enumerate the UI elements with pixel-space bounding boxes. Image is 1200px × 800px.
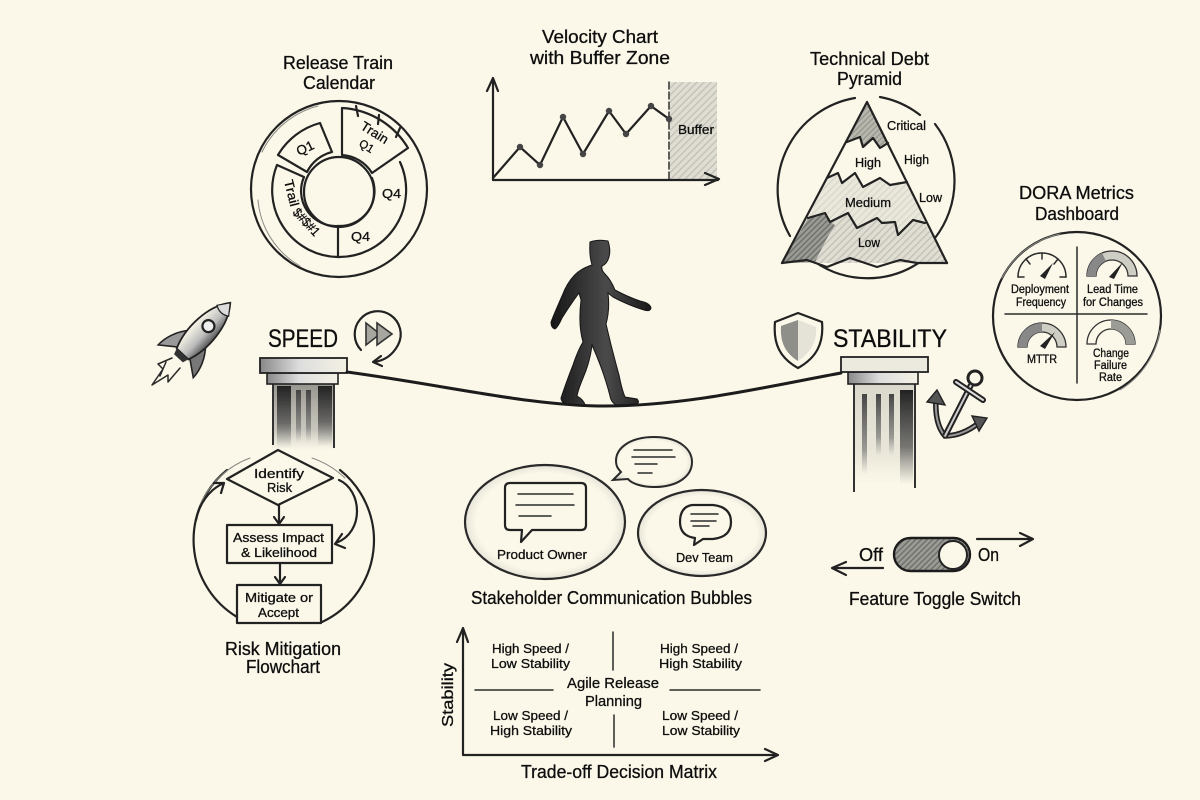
flow arrow: assess to mitigate	[275, 563, 285, 584]
column: right pillar	[841, 357, 928, 492]
pyramid labels: Medium	[845, 195, 891, 210]
heading: risk mitigation	[225, 639, 341, 677]
pyramid enclosing circle	[778, 97, 955, 278]
panel: stakeholder communication bubbles	[465, 437, 766, 608]
label: speed: SPEED	[268, 325, 338, 353]
segment: train Q1	[342, 106, 408, 173]
flow: assess impact: & Likelihood	[241, 545, 317, 560]
flow: identify risk	[227, 450, 333, 505]
gauge: change failure rate: Rate	[1099, 372, 1122, 384]
heading: technical debt pyramid: Technical Debt	[810, 49, 929, 69]
axis label: stability: Stability	[440, 663, 457, 727]
bubble: product owner: Product Owner	[497, 547, 588, 562]
flow: assess impact: Assess Impact	[233, 530, 324, 545]
segment: train Q1: Q1	[357, 138, 376, 156]
flow: assess impact	[227, 525, 332, 563]
quadrant: top right	[659, 641, 743, 671]
heading: trade-off matrix: Trade-off Decision Matrix	[521, 762, 717, 782]
matrix centre label: Agile Release	[567, 675, 659, 692]
calendar inner hub	[304, 157, 374, 227]
label: stability: STABILITY	[833, 325, 947, 353]
pyramid labels: Low	[919, 190, 943, 205]
flow: identify risk: Risk	[267, 480, 292, 495]
heading: velocity chart: Velocity Chart	[542, 27, 658, 47]
panel: DORA metrics dashboard	[993, 183, 1161, 400]
icon: rocket	[152, 286, 248, 385]
matrix axes	[457, 628, 778, 761]
pyramid layers	[782, 102, 947, 267]
quadrant: top right: High Stability	[659, 656, 743, 671]
quadrant: bottom left	[490, 708, 573, 738]
quadrant: top left: Low Stability	[491, 656, 571, 671]
heading: DORA metrics	[1019, 183, 1134, 224]
column: left pillar	[260, 358, 347, 450]
heading: DORA metrics: Dashboard	[1035, 204, 1119, 224]
icon: anchor	[927, 371, 987, 436]
toggle: on label: On	[978, 545, 999, 565]
dashboard circle	[993, 232, 1161, 400]
heading: stakeholder bubbles: Stakeholder Communication Bubbles	[471, 588, 752, 608]
heading: velocity chart: with Buffer Zone	[529, 48, 670, 68]
chart axes	[487, 78, 719, 185]
bubble: small speech	[613, 437, 692, 487]
velocity line	[493, 103, 672, 178]
gauge: deployment frequency: Frequency	[1016, 297, 1066, 309]
flow arrow: identify to assess	[274, 505, 284, 524]
flow: mitigate or accept: Accept	[258, 605, 299, 620]
matrix centre label	[567, 675, 659, 710]
panel: trade-off decision matrix	[440, 628, 778, 782]
quadrant: bottom left: High Stability	[490, 723, 573, 738]
flow: identify risk: Identify	[254, 466, 305, 481]
segment: trail: $#$#1	[290, 205, 323, 239]
segment: trail: Trail	[281, 178, 302, 208]
panel: technical debt pyramid	[778, 49, 955, 278]
segment: Q4 pair: Q4	[382, 186, 401, 201]
quadrant: top right: High Speed /	[660, 641, 738, 656]
gauge: MTTR	[1018, 323, 1066, 366]
heading: velocity chart	[529, 27, 670, 68]
panel: release train calendar	[251, 53, 427, 277]
heading: risk mitigation: Risk Mitigation	[225, 639, 341, 659]
gauge: change failure rate	[1087, 320, 1135, 384]
pyramid labels: High	[855, 155, 881, 170]
gauge: change failure rate: Failure	[1094, 360, 1127, 372]
gauge: MTTR: MTTR	[1027, 354, 1057, 366]
icon: shield	[775, 313, 822, 368]
heading: technical debt pyramid: Pyramid	[837, 69, 902, 89]
figure: tightrope walker	[551, 240, 651, 405]
segment: Q4 pair: Q4	[351, 229, 370, 244]
flow: mitigate or accept	[237, 585, 321, 623]
heading: release train calendar: Calendar	[303, 73, 375, 93]
pyramid labels: High	[904, 152, 929, 167]
curved arrow: feedback right	[335, 480, 357, 548]
heading: technical debt pyramid	[810, 49, 929, 89]
segment: trail	[272, 165, 338, 257]
calendar outer ring	[251, 101, 427, 277]
panel: velocity chart	[487, 27, 719, 185]
quadrant: top left: High Speed /	[492, 641, 569, 656]
heading: risk mitigation: Flowchart	[246, 657, 320, 677]
pyramid labels: Low	[858, 235, 881, 250]
sketch artwork wrapper	[152, 27, 1161, 782]
gauge: deployment frequency: Deployment	[1011, 284, 1070, 296]
icon: fast forward	[355, 311, 401, 366]
quadrant: bottom right: Low Stability	[662, 723, 741, 738]
bubble: dev team	[638, 490, 766, 576]
gauge: change failure rate: Change	[1093, 348, 1129, 360]
matrix dividers	[475, 632, 760, 747]
toggle switch	[894, 538, 970, 571]
arrow: left	[832, 562, 883, 575]
heading: release train calendar	[283, 53, 393, 93]
pyramid labels	[845, 118, 943, 250]
bubble: dev team: Dev Team	[676, 550, 733, 565]
segment: train Q1: Train	[358, 118, 391, 147]
matrix centre label: Planning	[585, 693, 642, 710]
curved arrow: feedback left	[196, 483, 224, 520]
buffer zone	[669, 82, 717, 179]
segment: Q1: Q1	[294, 137, 316, 159]
heading: release train calendar: Release Train	[283, 53, 393, 73]
panel: feature toggle switch	[832, 533, 1033, 609]
heading: DORA metrics: DORA Metrics	[1019, 183, 1134, 203]
quadrant: bottom right: Low Speed /	[662, 708, 738, 723]
panel: risk mitigation flowchart	[194, 450, 374, 677]
heading: feature toggle: Feature Toggle Switch	[849, 589, 1021, 609]
segment: Q1	[278, 123, 332, 172]
pyramid labels: Critical	[887, 118, 926, 133]
gauge: deployment frequency	[1011, 253, 1070, 309]
gauge: lead time: Lead Time	[1087, 284, 1138, 296]
toggle: off label: Off	[859, 545, 884, 565]
buffer zone: Buffer	[678, 122, 715, 137]
segment: Q4 pair	[338, 162, 406, 257]
quadrant: bottom right	[662, 708, 741, 738]
bubble: product owner	[465, 465, 625, 579]
gauge: lead time	[1083, 251, 1143, 309]
flowchart circle	[194, 458, 374, 622]
flow: mitigate or accept: Mitigate or	[245, 590, 314, 605]
quadrant: top left	[491, 641, 571, 671]
tightrope	[347, 372, 841, 406]
gauge: lead time: for Changes	[1083, 297, 1143, 309]
quadrant: bottom left: Low Speed /	[493, 708, 568, 723]
arrow: right	[977, 533, 1033, 546]
